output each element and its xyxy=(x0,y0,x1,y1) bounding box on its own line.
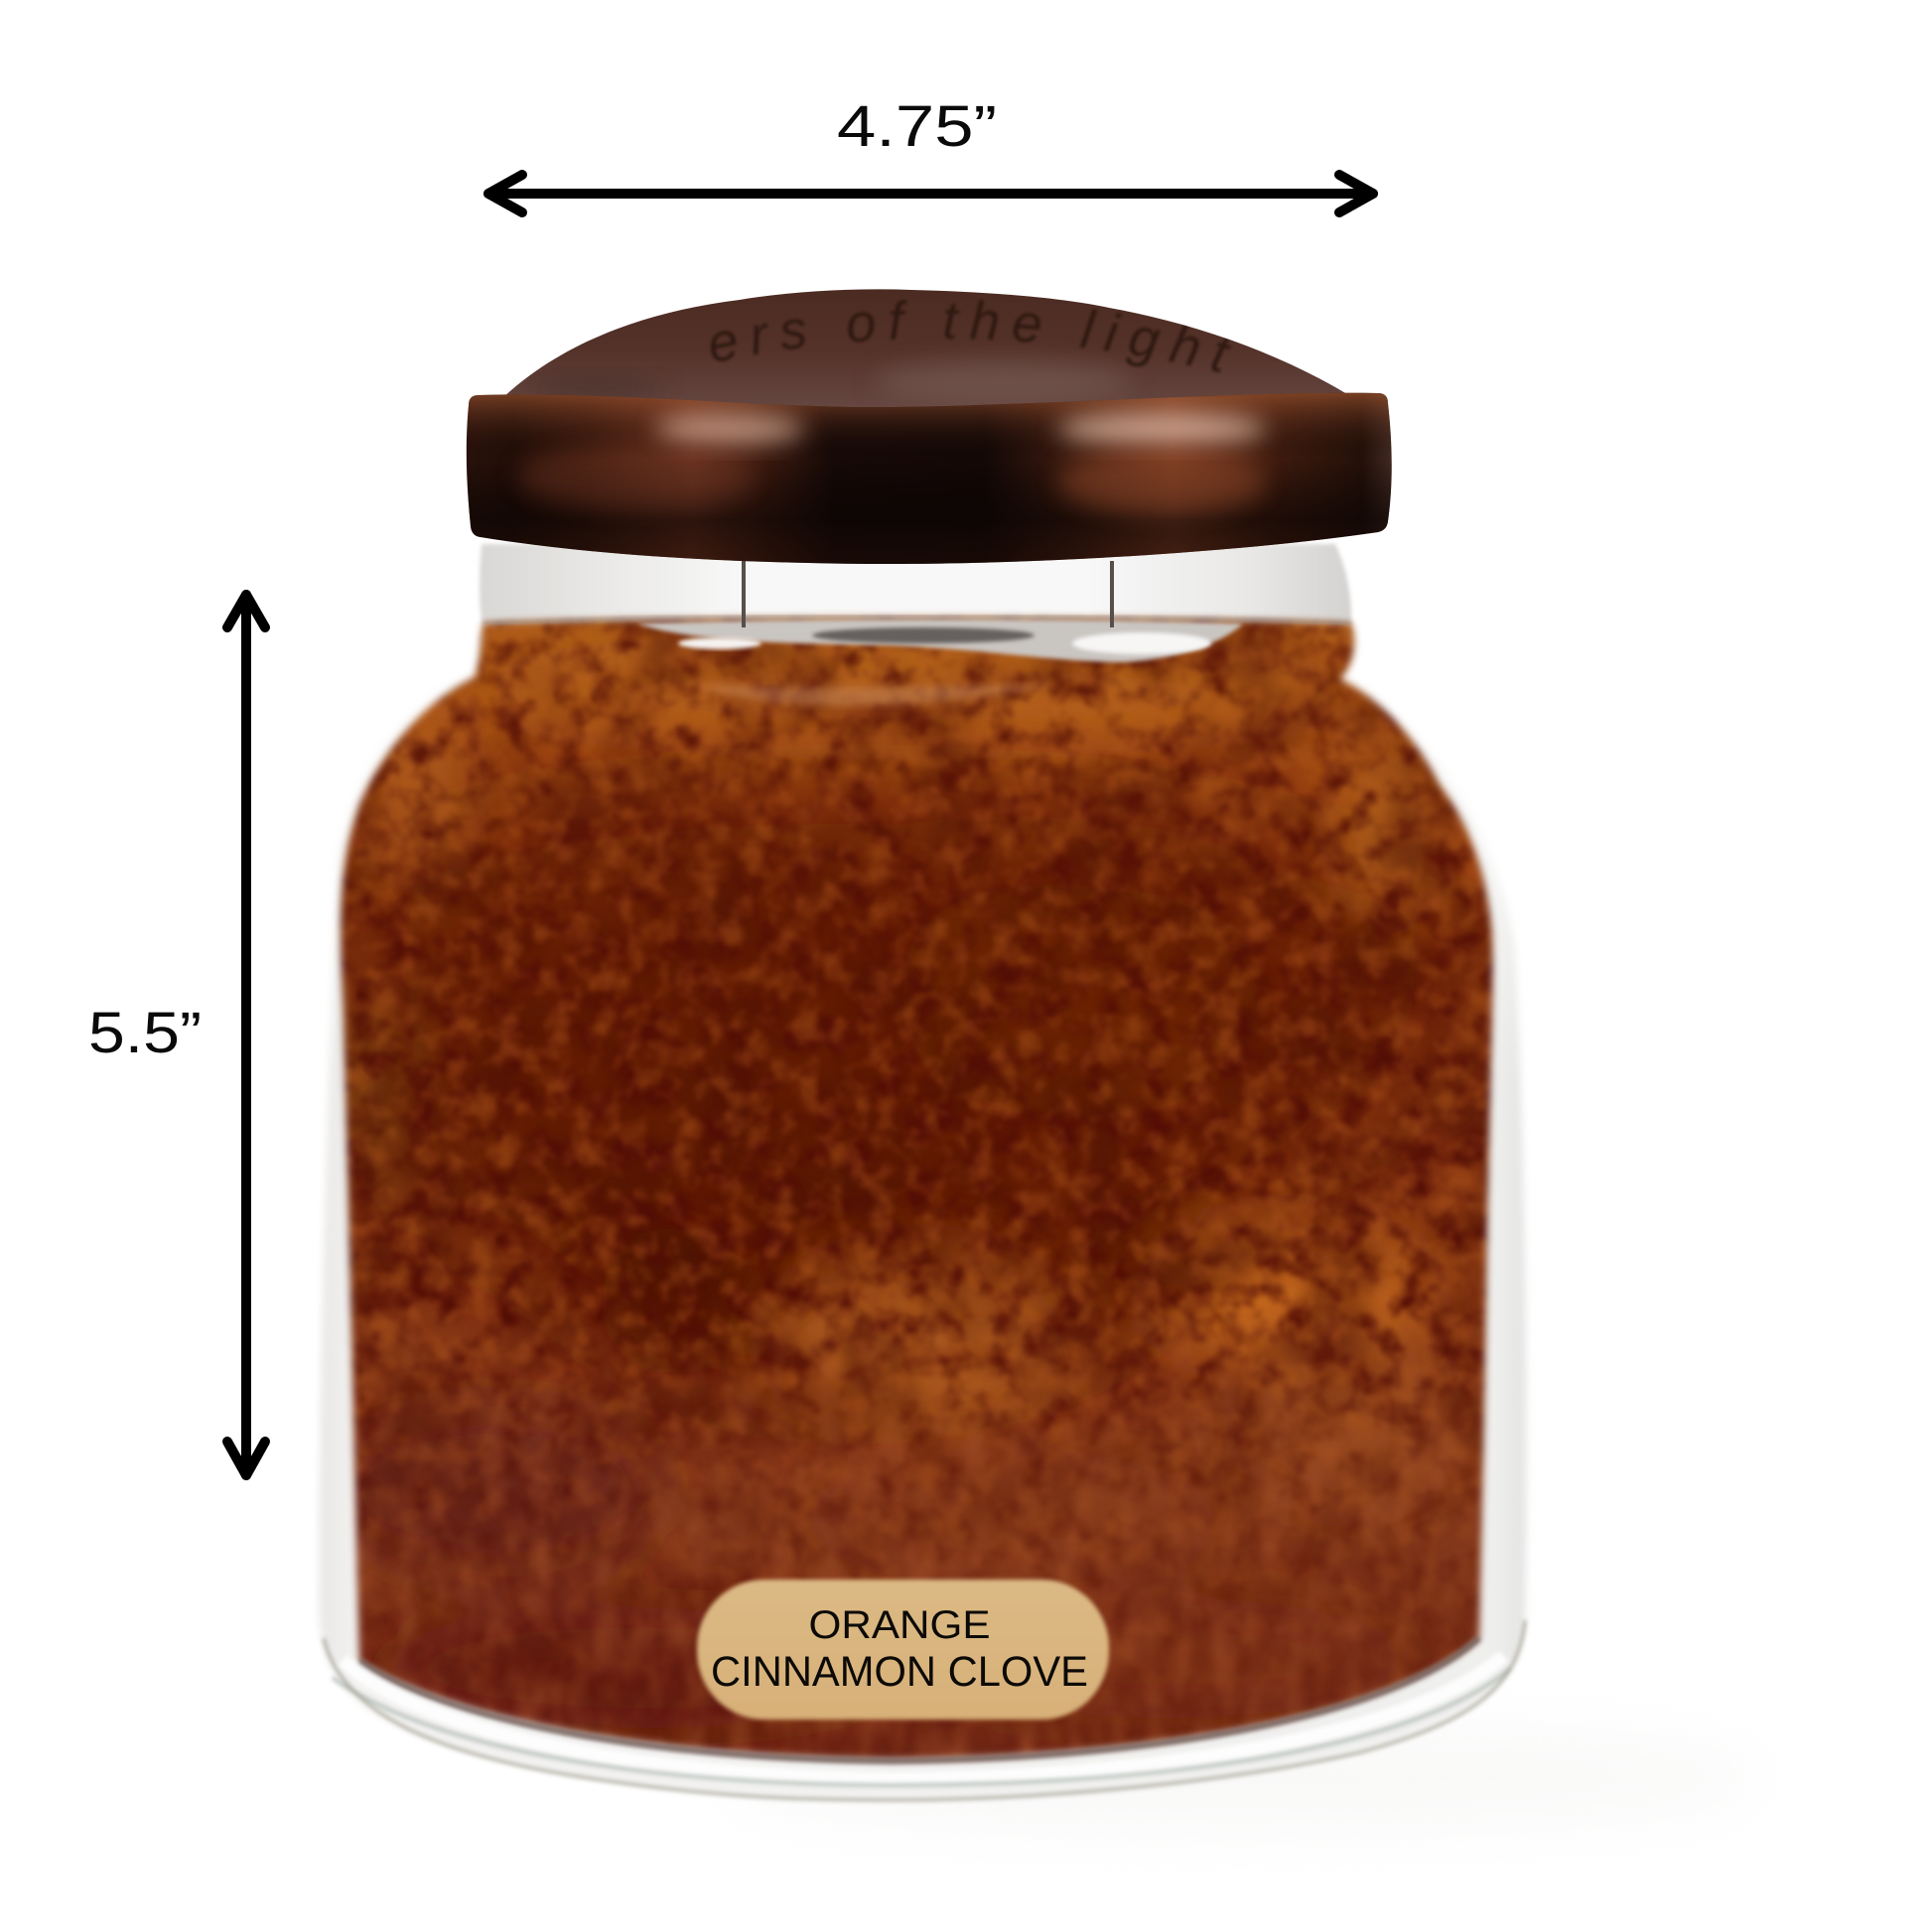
glass neck xyxy=(480,544,1351,635)
olive side tint xyxy=(368,1044,384,1093)
pale shoulder streak xyxy=(695,685,1052,706)
lid dome xyxy=(506,289,1345,407)
height label: 5.5” xyxy=(88,1001,202,1065)
label: Orange Cinnamon Clove: ORANGE xyxy=(808,1603,991,1647)
label: Orange Cinnamon Clove xyxy=(697,1580,1109,1720)
neck ring and melt pool xyxy=(483,616,1351,662)
wicks xyxy=(744,561,1112,627)
colour zones xyxy=(367,783,1459,1406)
infographic: candle jar with dimensions xyxy=(91,105,1529,1806)
label: Orange Cinnamon Clove: CINNAMON CLOVE xyxy=(711,1648,1088,1696)
glass base bands xyxy=(324,1620,1525,1800)
candle jar xyxy=(318,289,1529,1805)
height arrow xyxy=(227,595,265,1475)
wax fill xyxy=(298,596,1549,1787)
engraved lid lettering xyxy=(616,339,1271,389)
lid: ers of the light xyxy=(710,300,1231,373)
mottled texture xyxy=(340,614,1495,1708)
upper glass fade xyxy=(298,665,1549,1082)
glass jar body xyxy=(320,675,1526,1799)
lid rim xyxy=(467,393,1392,564)
width arrow xyxy=(488,175,1373,212)
lid xyxy=(467,289,1392,564)
blurred lower streaks xyxy=(357,1326,1484,1757)
width label: 4.75” xyxy=(837,94,997,159)
soft table shadow xyxy=(725,1727,1757,1827)
